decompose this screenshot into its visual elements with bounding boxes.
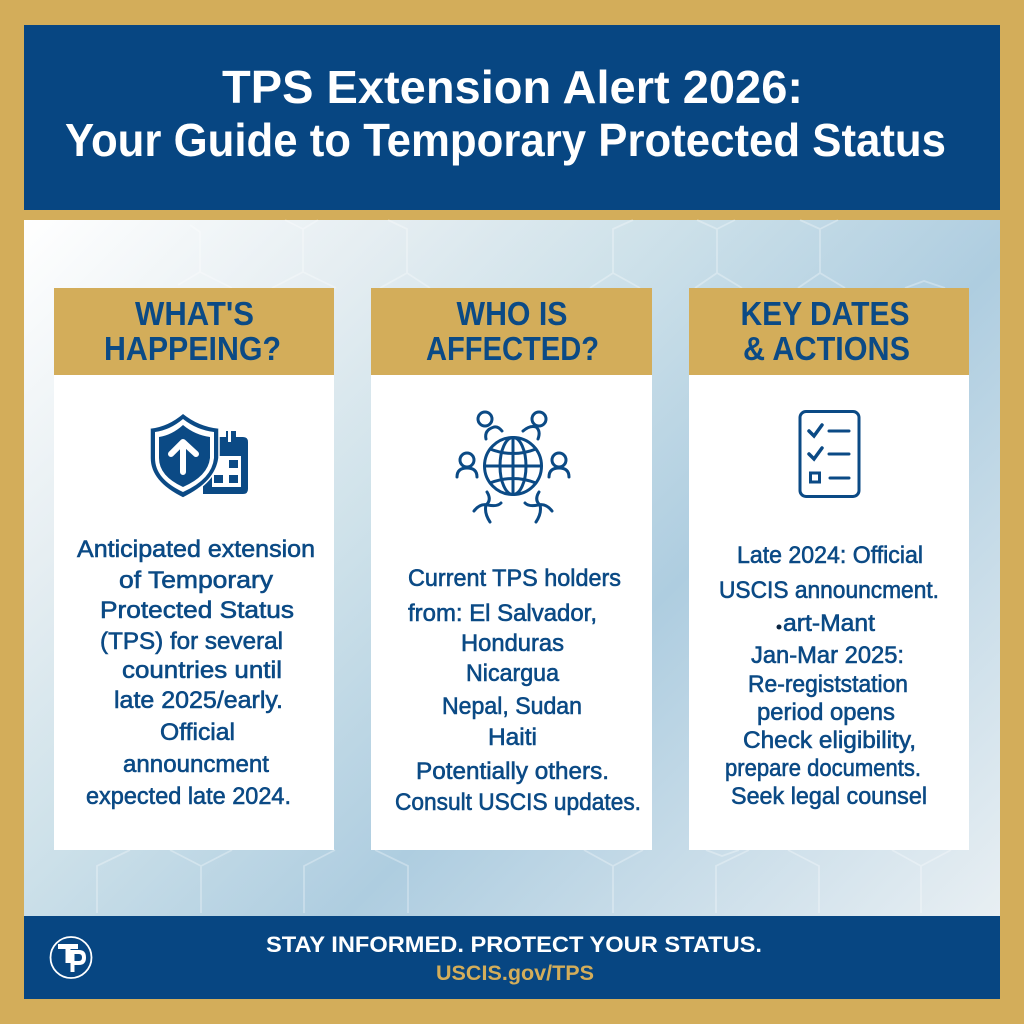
text block: key dates and actions: prepare documents. [725,755,921,782]
panel: what's happening [54,288,334,850]
text block: key dates and actions: Check eligibility, [743,727,916,754]
text block: what's happening: Protected Status [100,597,294,624]
text block: what's happening: of Temporary [119,567,273,594]
title [65,61,946,166]
heading: what's happening [54,288,334,375]
title banner [24,25,1000,210]
heading: who is affected: AFFECTED? [426,330,599,367]
footer band [24,916,1000,999]
text block: key dates and actions: Late 2024: Official [737,542,923,569]
text block: what's happening: Anticipated extension [77,536,315,563]
heading: who is affected: WHO IS [456,295,568,332]
title: TPS Extension Alert 2026: [222,61,803,113]
icon: globe [484,438,542,494]
text block: key dates and actions [719,542,939,810]
text block: what's happening: expected late 2024. [86,783,291,810]
icon: globe and people [457,412,569,522]
heading: who is affected [371,288,652,375]
title: Your Guide to Temporary Protected Status [65,114,946,166]
heading: key dates and actions [689,288,969,375]
text block: who is affected: Consult USCIS updates. [395,789,641,816]
heading: key dates and actions: KEY DATES [740,295,910,332]
text block: who is affected: Haiti [488,724,537,751]
footer link: USCIS.gov/TPS [436,962,594,985]
text block: what's happening [77,536,315,810]
text block: what's happening: countries until [122,657,282,684]
text block: who is affected: Nepal, Sudan [442,693,582,720]
text block: who is affected: Potentially others. [416,758,609,785]
panel: who is affected [371,288,652,850]
text block: who is affected: Nicargua [466,660,560,687]
text block: key dates and actions: period opens [757,699,895,726]
text block: key dates and actions: USCIS announcment. [719,577,939,604]
text block: key dates and actions: Jan-Mar 2025: [751,642,904,669]
icon: shield and calendar [150,413,248,498]
text block: what's happening: (TPS) for several [100,628,283,655]
heading: what's happening: WHAT'S [135,295,254,332]
background panel [24,220,1000,916]
text block: who is affected: from: El Salvador, [408,600,597,627]
icon: TP logo [50,937,92,978]
heading: key dates and actions: & ACTIONS [743,330,910,367]
text block: who is affected: Current TPS holders [408,565,621,592]
text block: what's happening: announcment [123,751,269,778]
icon: checklist [800,412,859,496]
text block: key dates and actions: Seek legal counsel [731,783,927,810]
text block: key dates and actions: art-Mant [783,610,875,637]
footer tagline: STAY INFORMED. PROTECT YOUR STATUS. [266,932,762,957]
text block: who is affected [395,565,641,816]
text block: what's happening: late 2025/early. [114,687,283,714]
panel: key dates and actions [689,288,969,850]
text block: key dates and actions: Re-registstation [748,671,908,698]
heading: what's happening: HAPPEING? [104,330,281,367]
text block: who is affected: Honduras [461,630,564,657]
text block: what's happening: Official [160,719,235,746]
